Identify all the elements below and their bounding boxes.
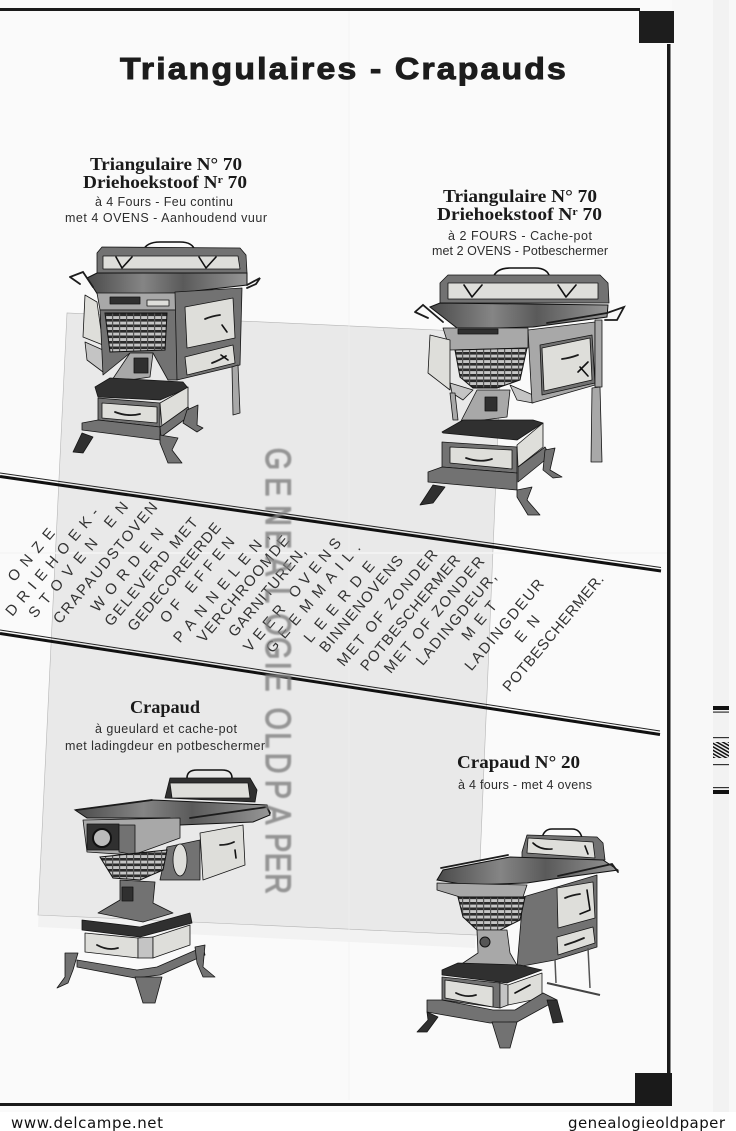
caption: Triangulaire 70, four ovens: à 4 Fours - Feu continu [95, 195, 233, 209]
oblique description text: GEEMMAIL. [263, 540, 364, 656]
oblique description text: MET OF ZONDER [334, 546, 441, 670]
caption: Triangulaire 70, two ovens: met 2 OVENS - Potbeschermer [432, 244, 608, 258]
oblique description text: GARNITUREN, [225, 544, 310, 640]
caption: Crapaud 20 [457, 752, 592, 792]
oblique description text: LADINGDEUR [461, 576, 548, 674]
stove illustration: crapaud with cache-pot [57, 770, 270, 1003]
frame: bottom rule [0, 1103, 636, 1106]
caption: Crapaud: Crapaud [130, 697, 200, 717]
folded edge strip [713, 0, 729, 1112]
corner square bottom right [635, 1073, 672, 1106]
caption: Triangulaire 70, four ovens: met 4 OVENS - Aanhoudend vuur [65, 211, 267, 225]
oblique description text: GEDECOREERDE [124, 520, 225, 635]
stove illustration: crapaud 20 [417, 829, 618, 1048]
oblique description text: STOVEN EN [25, 499, 132, 621]
rule above oblique band [0, 473, 661, 571]
oblique description text: EN [511, 612, 544, 646]
oblique description text: GELEVERD MET [101, 515, 202, 630]
caption: Triangulaire 70, two ovens: Triangulaire N° 70 [443, 186, 597, 206]
caption: Crapaud 20: Crapaud N° 20 [457, 752, 580, 772]
oblique description text: MET OF ZONDER [381, 553, 488, 677]
stove illustration: triangulaire two ovens [415, 268, 624, 515]
vertical marker stamp: GENEALOGIEOLDPAPER [258, 448, 298, 894]
caption: Crapaud [65, 697, 265, 753]
footer bar [0, 1112, 736, 1131]
edge marks on folded strip [713, 706, 729, 794]
oblique description text: OF EFFEN [157, 534, 238, 627]
rule below oblique band [0, 630, 660, 734]
frame: top rule [0, 8, 640, 11]
oblique description text: LADINGDEUR, [413, 569, 500, 669]
oblique description text: VEER OVENS [240, 535, 345, 655]
corner square top right [639, 11, 674, 43]
caption: Crapaud: met ladingdeur en potbeschermer [65, 739, 265, 753]
caption: Triangulaire 70, two ovens [432, 186, 608, 258]
oblique description text: MET [458, 598, 501, 644]
oblique description text [2, 499, 608, 695]
caption: Triangulaire 70, two ovens: 70 [578, 204, 602, 224]
oblique description text: DRIEHOEK- [2, 505, 103, 620]
right margin strip [672, 0, 736, 1112]
oblique description text: PANNELEN, [170, 528, 273, 646]
caption: Triangulaire 70, four ovens: 70 [223, 172, 247, 192]
oblique description text: WORDEN [88, 525, 167, 615]
oblique description text: CRAPAUDSTOVEN [50, 499, 161, 627]
caption: Triangulaire 70, four ovens [65, 154, 267, 225]
caption: Crapaud 20: à 4 fours - met 4 ovens [458, 778, 592, 792]
oblique description text: VERCHROOMDE [194, 532, 293, 646]
caption: Triangulaire 70, four ovens: Driehoekstoof N [83, 172, 208, 192]
caption: Triangulaire 70, four ovens: r [218, 174, 223, 186]
oblique description text: LEERDE [301, 558, 379, 646]
caption: Triangulaire 70, two ovens: Driehoekstoof N [437, 204, 562, 224]
stove illustration: triangulaire four ovens [70, 242, 260, 463]
caption: Triangulaire 70, two ovens: à 2 FOURS - Cache-pot [448, 229, 593, 243]
frame: right rule [667, 44, 670, 1074]
oblique description text: BINNENOVENS [316, 552, 407, 656]
title: Triangulaires - Crapauds [120, 51, 568, 86]
caption: Triangulaire 70, four ovens: Triangulaire N° 70 [90, 154, 242, 174]
oblique description text: ONZE [4, 525, 59, 585]
oblique description text: POTBESCHERMER. [499, 571, 608, 695]
caption: Triangulaire 70, two ovens: r [572, 206, 578, 218]
caption: Crapaud: à gueulard et cache-pot [95, 722, 238, 736]
oblique description text: POTBESCHERMER [357, 552, 464, 674]
